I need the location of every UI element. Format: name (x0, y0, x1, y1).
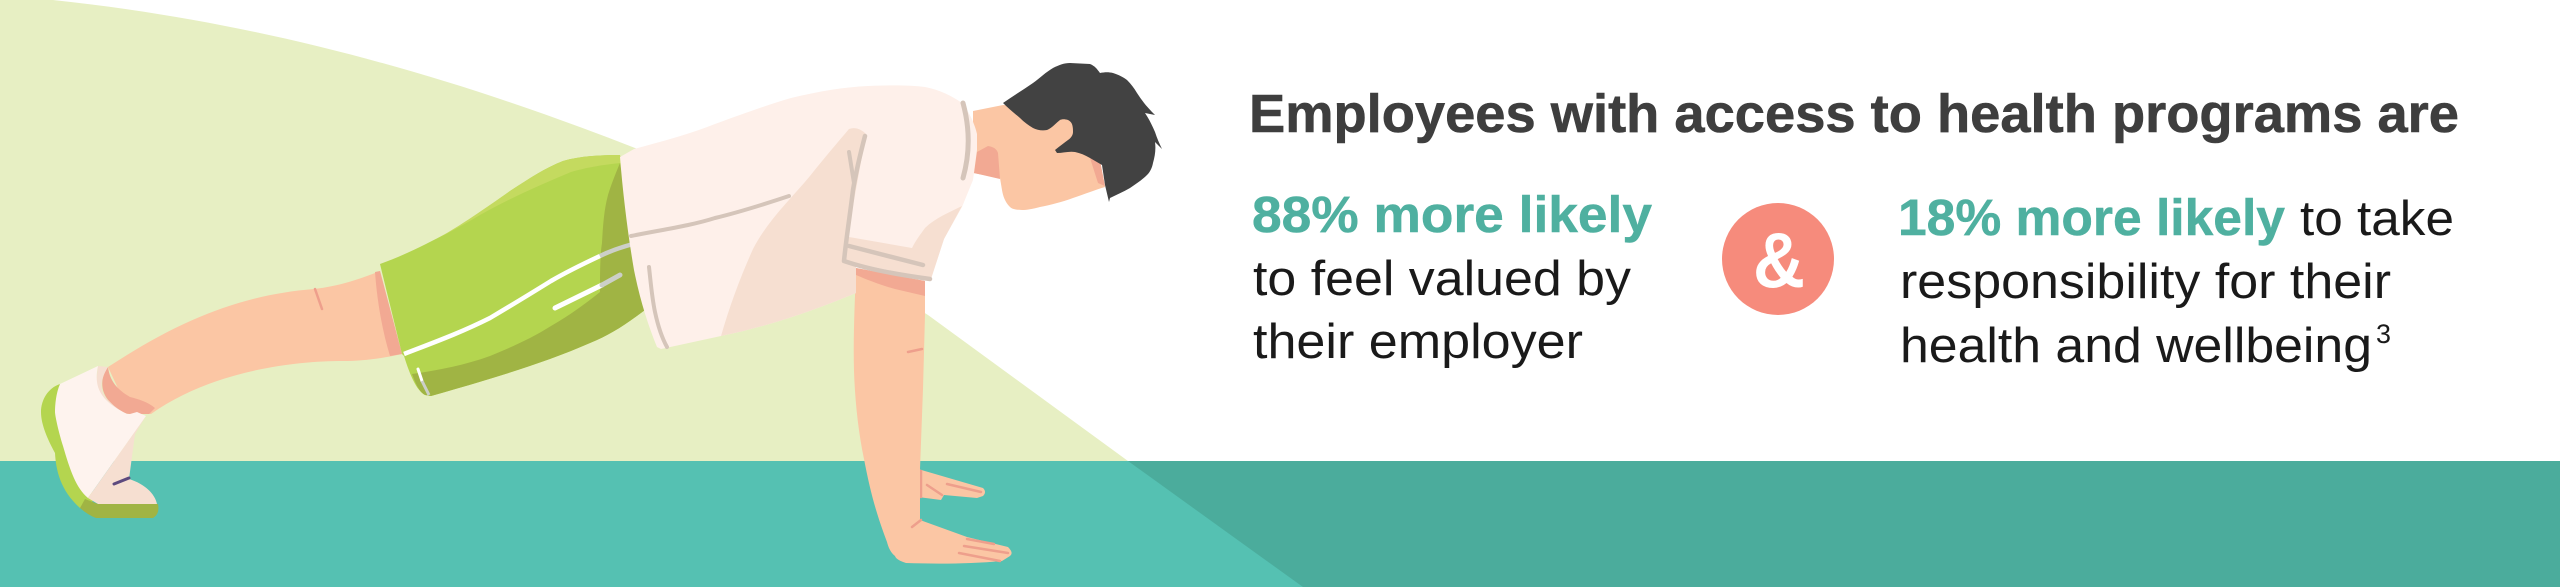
badge circle (1722, 203, 1834, 315)
background: pale green hill (0, 0, 1128, 461)
floor: dark teal band (0, 461, 2560, 587)
heading: Employees with access to health programs are (1249, 84, 2459, 144)
line: their employer: their employer (1253, 315, 1583, 369)
figure: man doing a plank (41, 63, 1162, 564)
floor: light teal band (0, 461, 1303, 587)
line: responsibility for their: responsibility for their (1900, 255, 2391, 309)
stat: 88% more likely: 88% more likely (1252, 186, 1653, 243)
text block: 88% more likely (1252, 186, 1653, 369)
neck and head (973, 105, 1105, 210)
line: health and wellbeing: health and wellbeing (1900, 319, 2372, 373)
stat: 18% more likely: 18% more likely (1898, 189, 2286, 246)
ampersand badge (1722, 203, 1834, 315)
ampersand glyph: & (1753, 216, 1805, 304)
shorts (380, 155, 645, 396)
line: to take: to take (2300, 192, 2454, 246)
line: to feel valued by: to feel valued by (1253, 252, 1632, 306)
shoe (41, 366, 158, 518)
text block: 18% more likely (1898, 189, 2454, 373)
back arm hand (918, 469, 985, 500)
front arm (854, 268, 1012, 564)
footnote marker: 3 (2376, 319, 2391, 349)
hair (1003, 63, 1162, 202)
leg (102, 271, 402, 414)
shirt (620, 85, 977, 349)
